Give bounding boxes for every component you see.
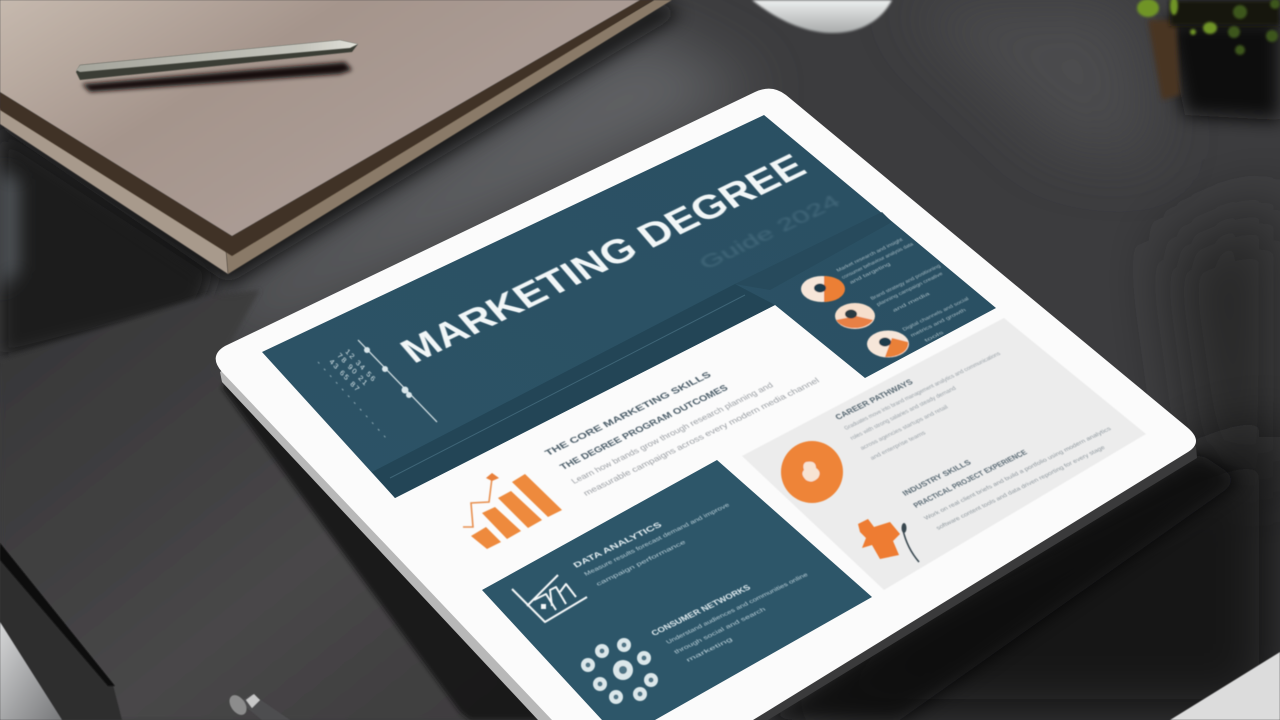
intro headings: THE CORE MARKETING SKILLS bbox=[543, 370, 714, 458]
feature text: metrics and growth bbox=[909, 308, 968, 338]
header dark band bbox=[372, 284, 775, 498]
icon: orange circle bbox=[781, 441, 843, 503]
panel: grey details bbox=[742, 318, 1146, 590]
feature text: and media bbox=[891, 292, 932, 313]
panel: three feature circles bbox=[801, 237, 970, 358]
header icon column: 12 34 56 bbox=[344, 347, 378, 384]
text block two: software content tools and data driven reporting for every stage bbox=[935, 444, 1107, 531]
faint subtitle: Guide 2024 bbox=[695, 192, 845, 274]
tablet side rim bbox=[220, 365, 558, 720]
text block one: and enterprise teams bbox=[869, 430, 927, 461]
icon: network of circles bbox=[581, 638, 658, 704]
feature text: consumer behaviour analysis data bbox=[840, 242, 915, 280]
feature text: Brand strategy and positioning bbox=[869, 264, 942, 301]
potted plant bbox=[1137, 0, 1280, 120]
feature text: and targeting bbox=[848, 262, 892, 285]
tablet body bbox=[216, 89, 1196, 720]
text block one: campaign performance bbox=[595, 539, 688, 587]
text block two: PRACTICAL PROJECT EXPERIENCE bbox=[912, 448, 1029, 509]
text block one: Graduates move into brand management analytics and communications bbox=[843, 351, 1002, 431]
intro headings: THE DEGREE PROGRAM OUTCOMES bbox=[558, 383, 730, 472]
text block two: marketing bbox=[685, 636, 735, 663]
mouse bbox=[752, 0, 892, 33]
header icon column bbox=[318, 340, 437, 438]
text block two: Work on real client briefs and build a portfolio using modern analytics bbox=[923, 426, 1113, 521]
icon: orange bar chart with arrow bbox=[463, 473, 562, 549]
pen on notebook bbox=[76, 40, 358, 92]
text block one bbox=[833, 351, 1002, 461]
text block two: CONSUMER NETWORKS bbox=[649, 583, 753, 637]
header icon column: 43 65 87 bbox=[328, 357, 362, 394]
text block one: Measure results forecast demand and improve bbox=[583, 502, 732, 577]
icon: white line chart bbox=[512, 575, 587, 622]
tablet bbox=[216, 89, 1197, 720]
intro body text: Learn how brands grow through research planning and bbox=[569, 381, 775, 485]
feature text: planning campaign creative bbox=[875, 271, 944, 307]
feature text bbox=[835, 237, 970, 343]
dark desk mat bbox=[0, 290, 540, 720]
header icon column: 78 90 21 bbox=[336, 351, 370, 388]
tablet shadow, left bbox=[222, 372, 545, 720]
text block one: DATA ANALYTICS bbox=[571, 520, 664, 569]
circle 2 bbox=[835, 303, 875, 329]
text block two bbox=[649, 572, 810, 663]
text block two: INDUSTRY SKILLS bbox=[901, 458, 973, 497]
notebook bbox=[0, 0, 680, 284]
bottom pen bbox=[226, 692, 290, 720]
icon: orange puzzle piece bbox=[858, 519, 919, 562]
lower-left desk objects bbox=[0, 543, 290, 720]
panel: intro text with orange bar chart bbox=[463, 370, 821, 549]
panel: teal lower bbox=[482, 460, 872, 720]
text block one: CAREER PATHWAYS bbox=[833, 377, 915, 421]
circle 1 bbox=[801, 276, 845, 302]
text block one: roles with strong salaries and steady demand bbox=[849, 385, 958, 441]
circle 3 bbox=[867, 330, 909, 358]
text block two: through social and search bbox=[673, 606, 768, 655]
lower-right white object bbox=[1170, 652, 1280, 720]
tablet shadow, right bbox=[760, 452, 1240, 720]
intro body text: measurable campaigns across every modern media channel bbox=[581, 376, 821, 497]
text block one bbox=[571, 502, 732, 587]
text block two: Understand audiences and communities online bbox=[665, 572, 810, 645]
title: MARKETING DEGREE bbox=[392, 147, 814, 371]
feature text: tools bbox=[923, 330, 946, 343]
feature text: Market research and insight bbox=[835, 237, 905, 273]
header panel bbox=[262, 115, 996, 498]
text block one: across agencies startups and retail bbox=[859, 404, 950, 451]
feature text: Digital channels and social bbox=[901, 296, 970, 332]
